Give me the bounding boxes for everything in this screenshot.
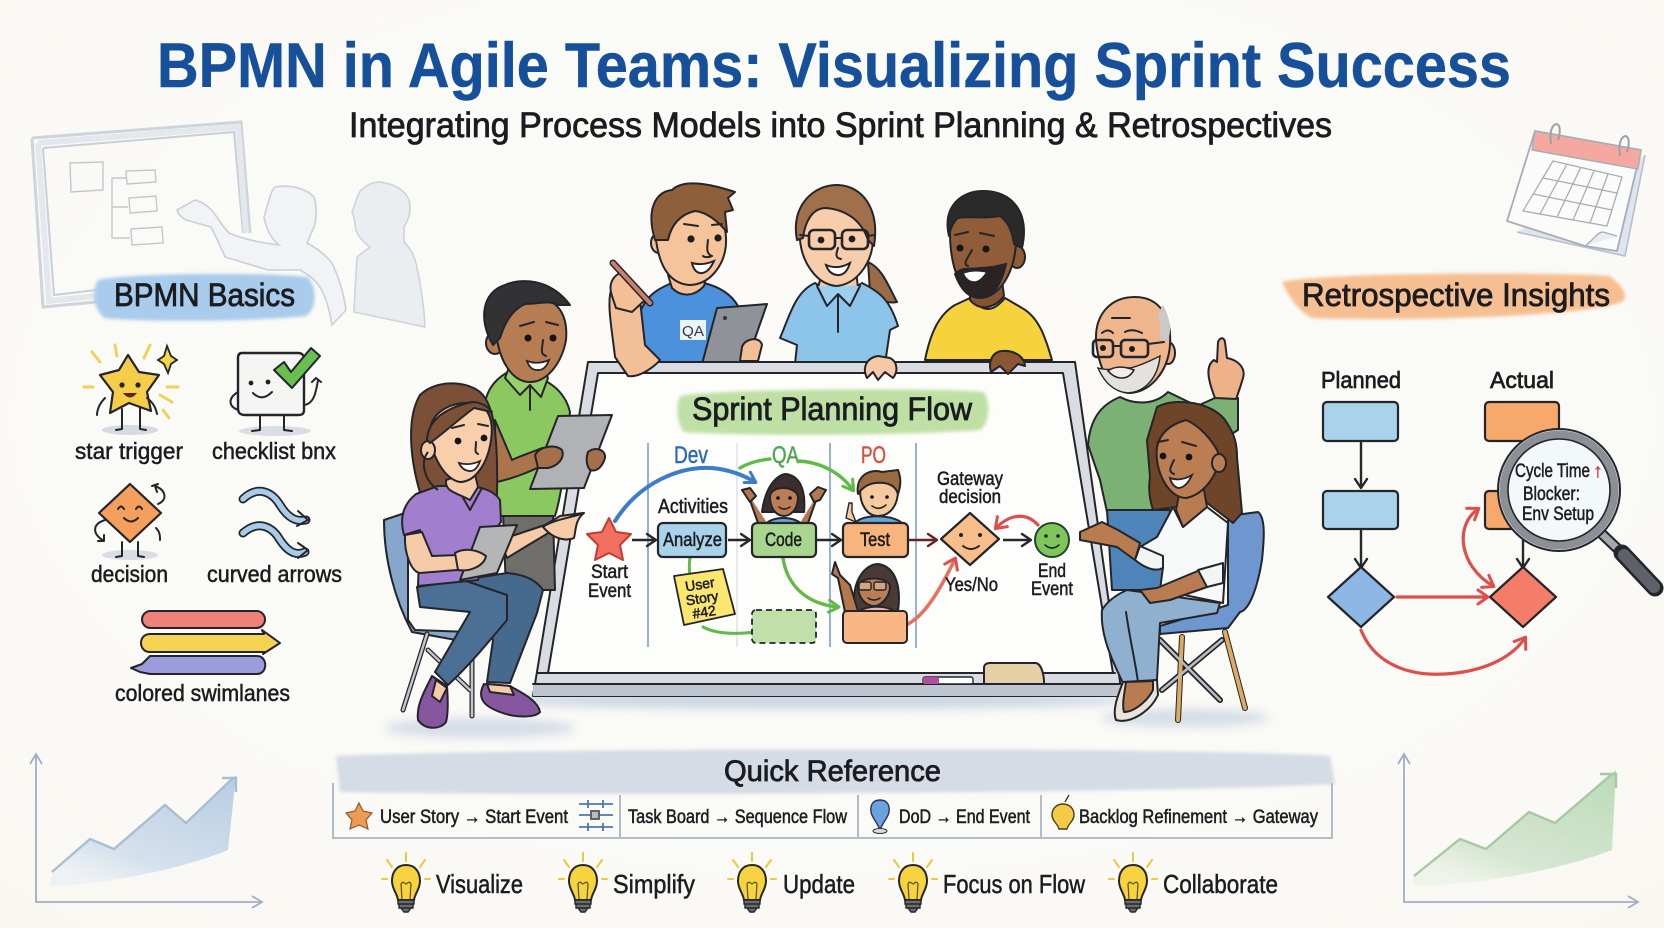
sticky note: user story	[674, 569, 735, 625]
task: Code	[752, 523, 816, 557]
subtitle: Integrating Process Models into Sprint Planning & Retrospectives	[349, 106, 1332, 145]
tip: simplify: Simplify	[613, 869, 695, 899]
person: teammates' hands on board top	[865, 351, 1025, 380]
hair back	[1147, 402, 1242, 523]
whiteboard	[495, 362, 1135, 709]
resting arm	[1140, 570, 1207, 603]
sequence arrows	[632, 539, 1030, 541]
heading: Sprint Planning Flow: Sprint Planning Flow	[692, 391, 973, 427]
icon: calendar	[1507, 124, 1645, 256]
label: checklist box: checklist bnx	[212, 438, 336, 464]
swimlane labels: PO	[861, 442, 886, 469]
label: end event	[1031, 561, 1074, 600]
person: yellow shirt teammate	[925, 191, 1052, 360]
label: star trigger: star trigger	[75, 438, 183, 464]
label: gateway decision	[937, 469, 1003, 508]
task: Analyze	[658, 523, 726, 557]
tip: update: Update	[783, 869, 855, 899]
icon: sequence grid	[579, 800, 613, 831]
heading: Quick Reference	[336, 749, 1335, 794]
label: start event: Start	[591, 562, 629, 583]
icon: magnifying glass	[1498, 429, 1655, 588]
task: Analyze: Analyze	[663, 530, 722, 551]
label: activities: Activities	[658, 496, 728, 518]
item: task board: Task Board → Sequence Flow	[628, 807, 847, 828]
tips row	[382, 853, 1278, 912]
person: blue shirt developer	[636, 183, 767, 364]
illustration: sprint team and whiteboard	[384, 183, 1270, 738]
icon: curved arrows	[243, 491, 308, 558]
chart: right trend sketch	[1398, 754, 1638, 908]
table frame	[333, 783, 1332, 838]
label: actual: Actual	[1490, 367, 1554, 393]
label: gateway decision: decision	[939, 487, 1001, 508]
heading: BPMN Basics	[94, 274, 315, 321]
label: end event: Event	[1031, 579, 1074, 600]
task: Test	[843, 523, 908, 557]
planned flow	[1323, 402, 1398, 627]
start event star	[587, 518, 631, 560]
panel: BPMN basics	[75, 274, 342, 706]
tip: collaborate	[1109, 853, 1278, 912]
task: blank review box	[843, 611, 907, 643]
person: seated woman in purple	[384, 383, 584, 738]
label: curved arrows: curved arrows	[207, 561, 342, 587]
white shirt	[1140, 507, 1228, 603]
tip: collaborate: Collaborate	[1163, 869, 1278, 899]
swimlane labels: Dev	[674, 442, 708, 469]
mini character: QA	[742, 474, 826, 524]
heading: Quick Reference: Quick Reference	[724, 755, 941, 788]
heading: Retrospective Insights: Retrospective Insights	[1302, 277, 1610, 313]
arrows: curved lane connectors	[615, 459, 1038, 633]
label: gateway decision: Gateway	[937, 469, 1003, 490]
sticky note: user story: Story	[685, 588, 719, 608]
tip: focus on flow	[889, 853, 1085, 912]
tip: update	[728, 853, 855, 912]
item: backlog refinement: Backlog Refinement → Gateway	[1079, 807, 1318, 828]
mini character: PO	[846, 470, 902, 523]
item: definition of done: DoD → End Event	[899, 807, 1031, 828]
person: light blue polo with glasses	[780, 185, 898, 364]
near and far legs	[463, 573, 543, 683]
illustration: ghost whiteboard with silhouettes	[32, 122, 425, 327]
actual flow	[1485, 402, 1559, 627]
icon: checklist box	[230, 348, 321, 436]
person: seated woman in white	[1080, 402, 1270, 727]
chair	[1160, 512, 1264, 720]
swimlane labels	[674, 442, 886, 469]
icon: magnifying glass: Cycle Time	[1515, 461, 1590, 482]
mini character: reviewer with glasses	[832, 562, 899, 612]
sticky note: user story: #42	[691, 602, 717, 622]
tip: focus on flow: Focus on Flow	[943, 869, 1085, 899]
label: decision: decision	[91, 561, 168, 587]
icon: magnifying glass: Env Setup	[1522, 504, 1594, 525]
accessory: marker and eraser	[923, 663, 1044, 684]
shoes	[1115, 680, 1158, 721]
label: yes/no: Yes/No	[945, 575, 998, 596]
heading: BPMN Basics: BPMN Basics	[114, 277, 295, 313]
arrows: deviation paths	[1361, 509, 1525, 674]
task: Code: Code	[765, 530, 802, 551]
label: planned: Planned	[1321, 367, 1401, 393]
icon: magnifying glass: ↑	[1593, 461, 1602, 482]
outstretched arm	[1080, 522, 1140, 560]
person: blue shirt developer: QA	[682, 323, 704, 340]
swimlane dividers	[648, 443, 916, 648]
swimlane labels: QA	[772, 442, 799, 469]
sticky note: user story: User	[684, 574, 716, 594]
label: start event: Event	[588, 581, 632, 602]
end event	[1035, 523, 1069, 557]
label: start event	[588, 562, 632, 602]
diagram: sprint planning flow	[587, 442, 1074, 648]
person: blue shirt developer hands over board	[609, 263, 762, 376]
icon: magnifying glass: Blocker:	[1523, 484, 1580, 505]
tip: simplify	[559, 853, 695, 912]
label: colored swimlanes: colored swimlanes	[115, 680, 290, 706]
chart: left trend sketch	[30, 754, 262, 908]
chair	[384, 512, 472, 716]
icon: star	[346, 803, 372, 829]
item: user story: User Story → Start Event	[380, 807, 569, 828]
icon: location pin	[871, 800, 889, 834]
person: older man in green sweater	[1088, 297, 1244, 590]
icon: star trigger	[84, 345, 178, 435]
tip: visualize	[382, 853, 523, 912]
panel: quick reference	[333, 749, 1335, 838]
legs	[1102, 590, 1220, 683]
label: end event: End	[1038, 561, 1066, 582]
icon: decision diamond	[95, 484, 164, 560]
icon: small bulb	[1052, 795, 1074, 829]
tip: visualize: Visualize	[436, 869, 523, 899]
person: green polo teammate with tablet	[483, 281, 612, 590]
task: Test: Test	[860, 530, 891, 551]
neck and face	[1176, 490, 1207, 527]
panel: retrospective insights	[1282, 124, 1655, 674]
icon: colored swimlanes	[131, 611, 280, 674]
task: dashed placeholder	[752, 610, 816, 643]
gateway diamond	[941, 513, 999, 565]
title: BPMN in Agile Teams: Visualizing Sprint Success	[157, 31, 1511, 101]
